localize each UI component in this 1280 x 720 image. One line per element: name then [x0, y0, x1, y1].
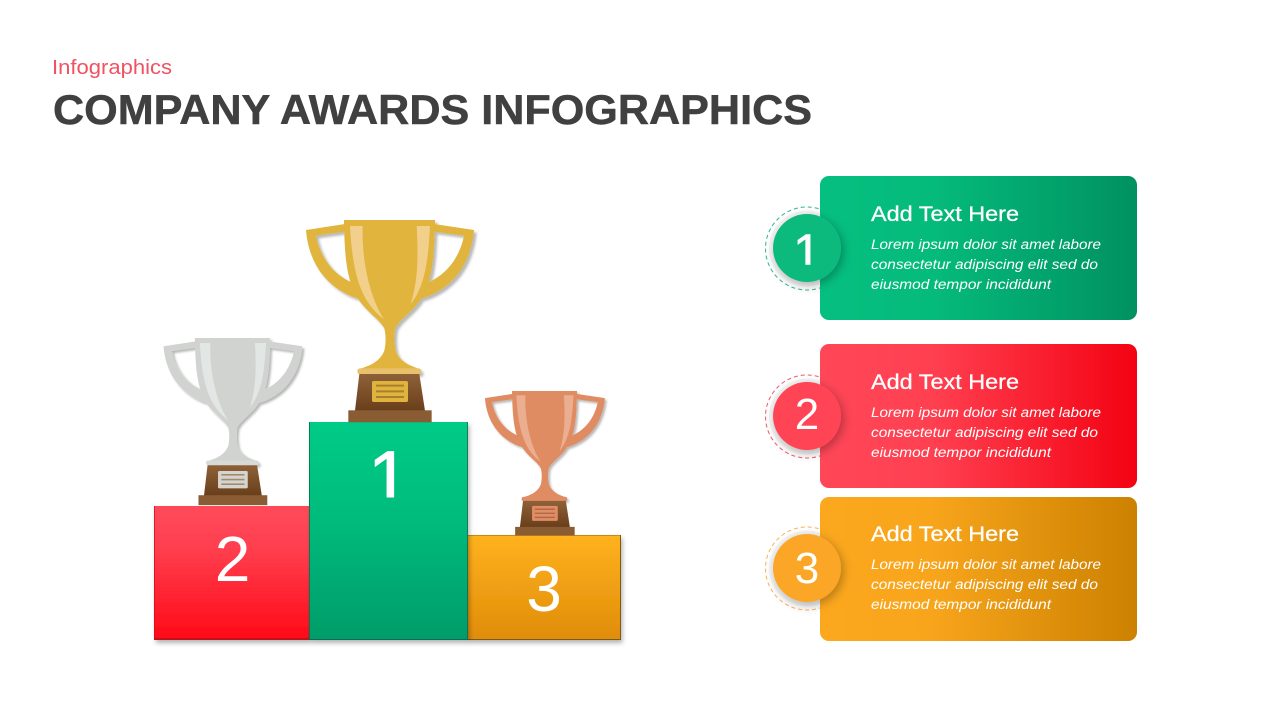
body text 3: eiusmod tempor incididunt [871, 597, 1052, 612]
body text 3 [871, 557, 1101, 612]
podium step 2: 2 [215, 523, 250, 595]
panel: item 3 [766, 497, 1137, 641]
podium step 3 [467, 535, 621, 640]
trophy: bronze [485, 391, 605, 535]
title: COMPANY AWARDS INFOGRAPHICS [53, 86, 812, 133]
badge 2: 2 [795, 390, 819, 439]
heading 1: Add Text Here [871, 203, 1019, 226]
podium step 1: 1 [368, 436, 410, 521]
trophy: gold [306, 220, 474, 422]
heading 3: Add Text Here [871, 523, 1019, 546]
panel: item 1 [766, 176, 1137, 320]
body text 2: consectetur adipiscing elit sed do [871, 425, 1099, 440]
badge 1 [773, 214, 841, 282]
panel: item 2 [766, 344, 1137, 488]
body text 1: consectetur adipiscing elit sed do [871, 257, 1099, 272]
body text 1: eiusmod tempor incididunt [871, 277, 1052, 292]
podium step 3: 3 [526, 553, 562, 625]
body text 2: Lorem ipsum dolor sit amet labore [871, 405, 1101, 420]
body text 2: eiusmod tempor incididunt [871, 445, 1052, 460]
podium step 2 [154, 506, 309, 640]
body text 2 [871, 405, 1101, 460]
body text 3: consectetur adipiscing elit sed do [871, 577, 1099, 592]
badge 3 [773, 534, 841, 602]
eyebrow label: Infographics [52, 57, 172, 79]
body text 3: Lorem ipsum dolor sit amet labore [871, 557, 1101, 572]
badge 2 [773, 382, 841, 450]
badge 1: 1 [793, 224, 821, 280]
podium [154, 422, 621, 640]
podium step 1 [309, 422, 468, 640]
badge 3: 3 [795, 544, 819, 593]
body text 1: Lorem ipsum dolor sit amet labore [871, 237, 1101, 252]
body text 1 [871, 237, 1101, 292]
trophy: silver [164, 338, 302, 505]
heading 2: Add Text Here [871, 371, 1019, 394]
